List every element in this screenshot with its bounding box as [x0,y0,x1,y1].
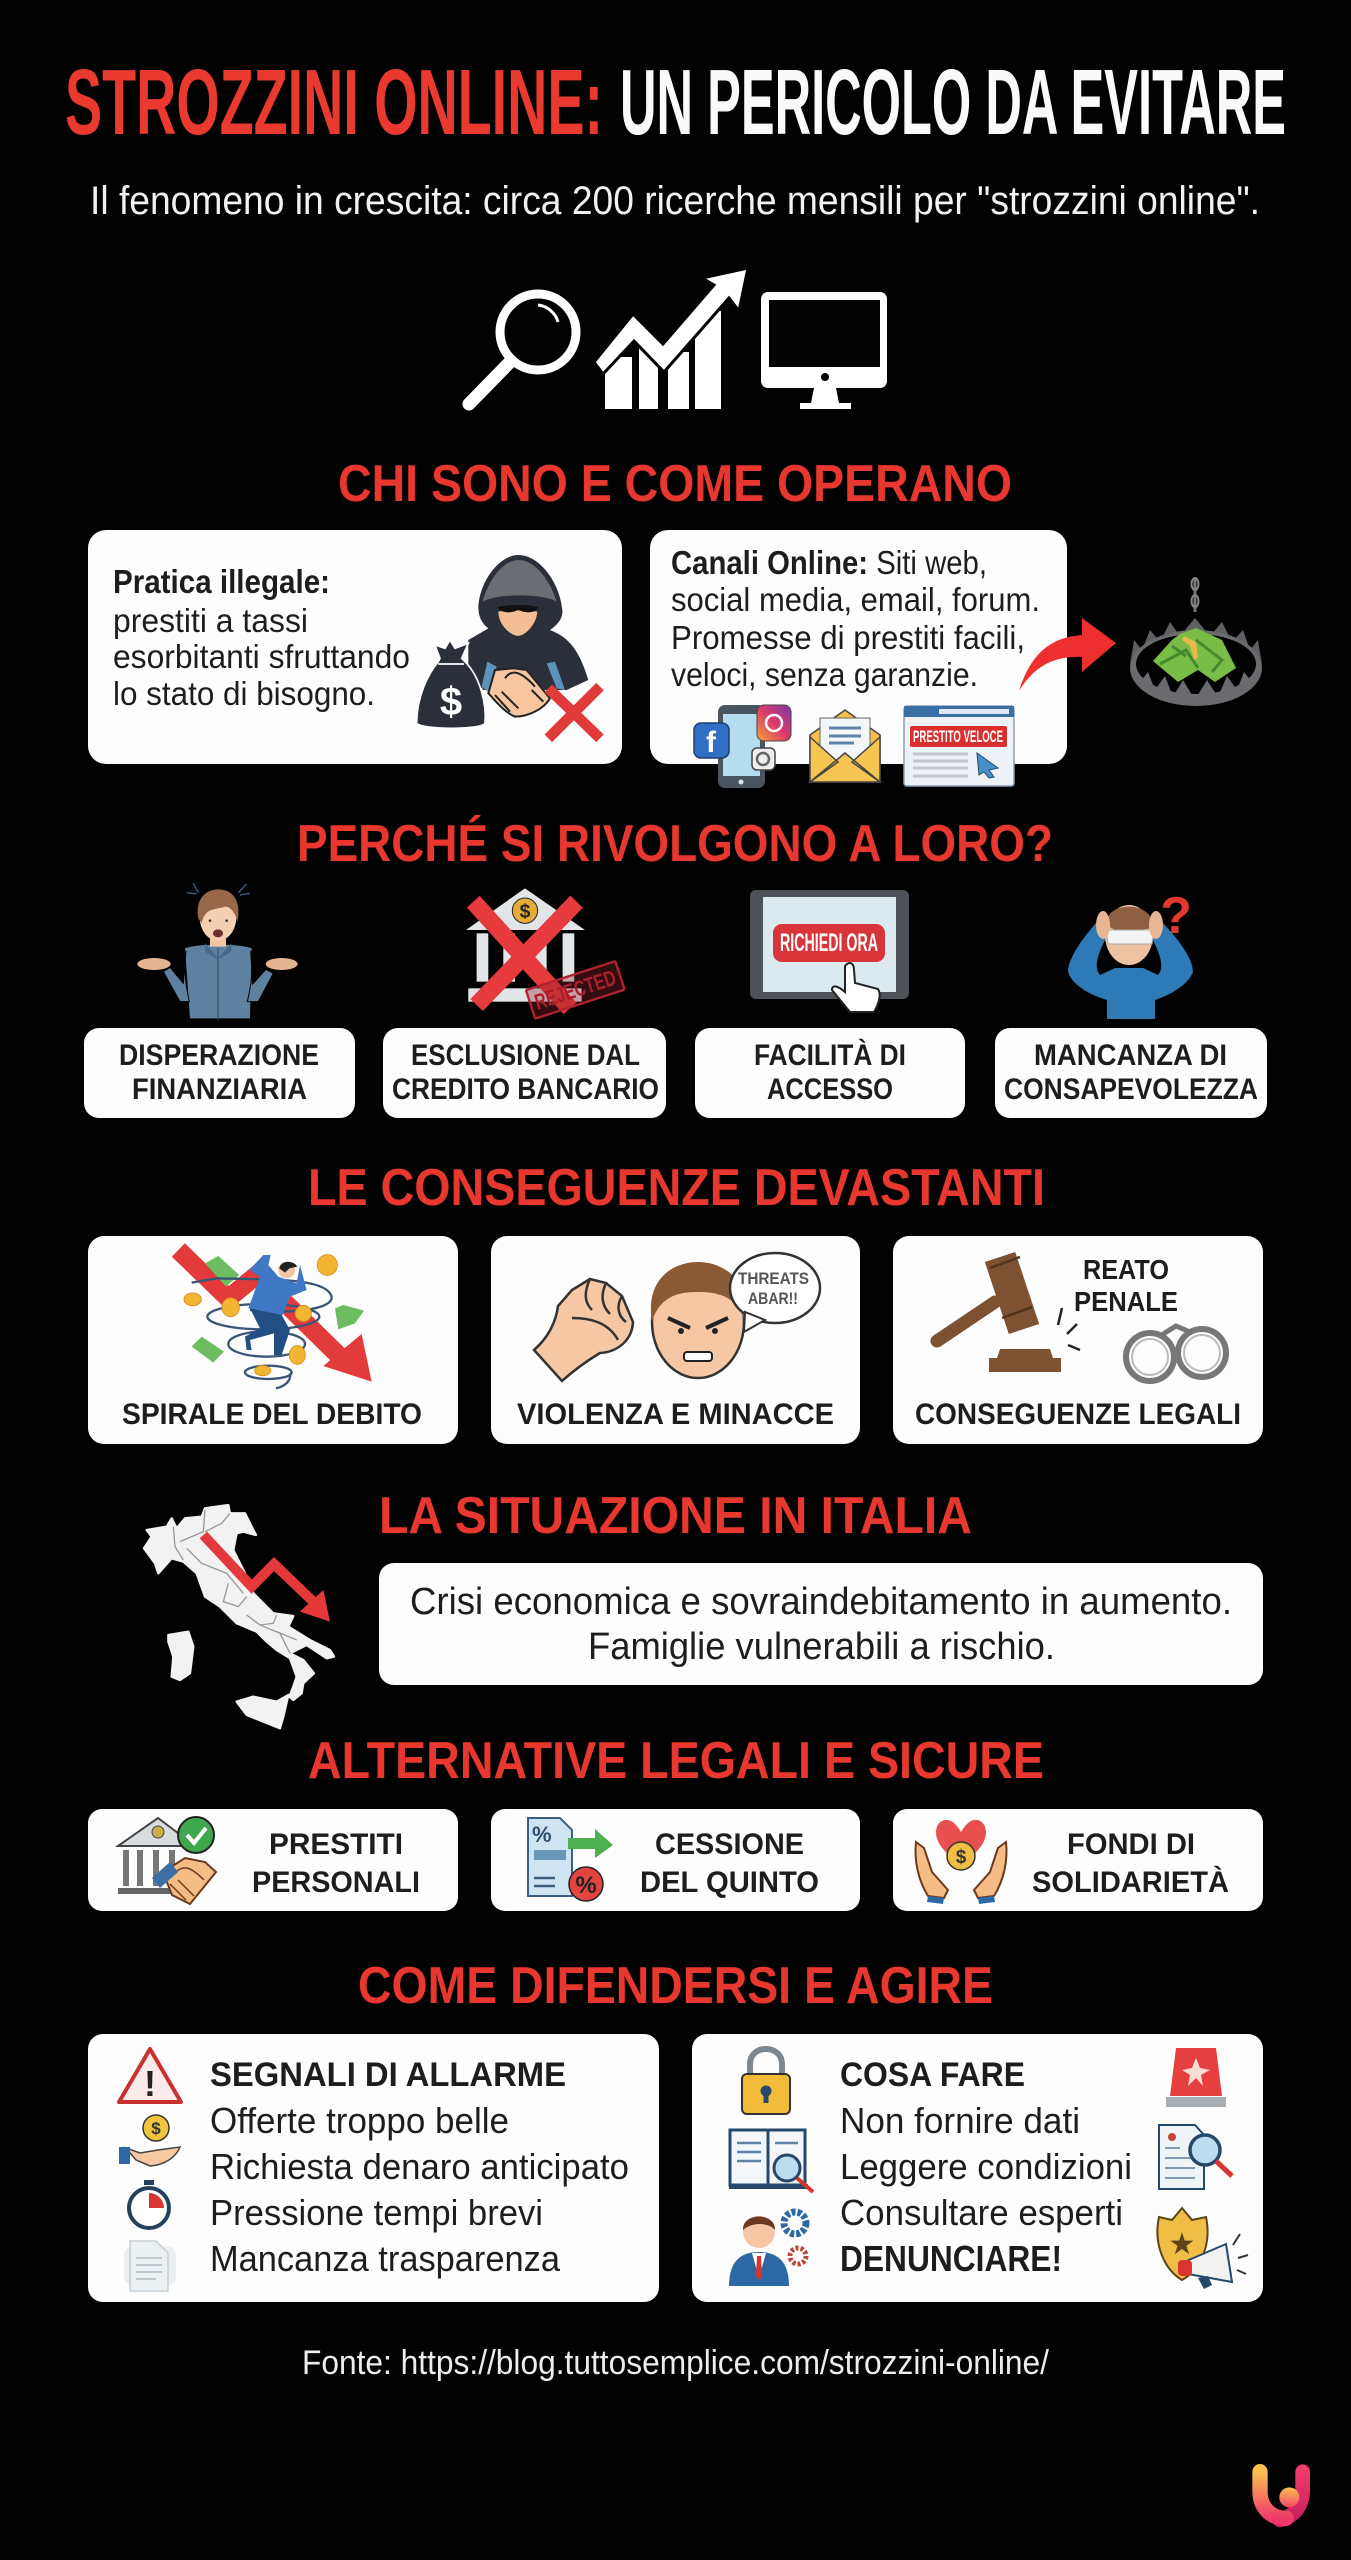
panel: segnali di allarme [88,2034,659,2302]
label box: facilità di accesso: FACILITÀ DI [754,1038,906,1072]
text: canali online: Promesse di prestiti facili, [671,619,1025,656]
text: segnali di allarme: SEGNALI DI ALLARME [210,2056,566,2094]
label: cessione del quinto: CESSIONE [655,1828,804,1861]
icon: map of italy with falling arrow [144,1505,334,1728]
label: cessione del quinto: DEL QUINTO [640,1866,819,1899]
text: cosa fare: Non fornire dati [840,2100,1080,2141]
panel: crisi economica: Famiglie vulnerabili a rischio. [588,1626,1055,1668]
icon: browser window prestito veloce [904,706,1014,786]
label: violenza e minacce: VIOLENZA E MINACCE [517,1398,834,1431]
text: cosa fare: Consultare esperti [840,2192,1123,2233]
icon: threats speech bubble: ABAR!! [748,1289,798,1308]
icon: tablet with richiedi ora button: RICHIEDI ORA [780,929,878,957]
icon: document with percent and arrow [528,1818,613,1901]
text: canali online [671,544,1040,693]
icon: bear trap with money [1130,578,1262,706]
label box: mancanza di consapevolezza: CONSAPEVOLEZZA [1004,1073,1258,1106]
icon: open book with magnifier [729,2130,813,2192]
label box: facilità di accesso [695,1028,965,1118]
label box: mancanza di consapevolezza: MANCANZA DI [1034,1039,1227,1072]
panel: fondi di solidarietà [893,1809,1263,1911]
icon: magnifier [469,294,576,404]
text: cosa fare [840,2056,1132,2279]
logo [1260,2472,1303,2520]
heading: alternative legali e sicure: ALTERNATIVE LEGALI E SICURE [308,1732,1044,1790]
icon: hands holding heart and coin: $ [956,1847,967,1868]
icon: hooded loan shark with money bag and handshake: $ [440,680,462,724]
icon: alarm siren [1166,2048,1226,2107]
text: pratica illegale [113,563,410,712]
heading: le conseguenze devastanti: LE CONSEGUENZE DEVASTANTI [308,1159,1045,1217]
panel: crisi economica [379,1563,1263,1685]
icon: document with percent and arrow: % [575,1872,597,1899]
label box: esclusione dal credito bancario: ESCLUSIONE DAL [411,1039,640,1072]
label box: esclusione dal credito bancario [383,1028,666,1118]
panel: crisi economica: Crisi economica e sovraindebitamento in aumento. [410,1581,1232,1623]
icon: hooded loan shark with money bag and handshake [417,555,600,738]
icon: phone with social apps: f [706,726,717,759]
icon: bank with check and handshake [118,1817,216,1904]
text: canali online: veloci, senza garanzie. [671,656,978,693]
icon: debt spiral with falling man [178,1250,372,1388]
text: segnali di allarme: Richiesta denaro anticipato [210,2146,629,2187]
text: segnali di allarme [210,2056,629,2279]
panel: cosa fare [692,2034,1263,2302]
label box: disperazione finanziaria [84,1028,355,1118]
icon: blindfolded person with question mark: ? [1160,887,1192,945]
icon: hands holding heart and coin [916,1820,1006,1904]
icon: judge gavel [937,1257,1080,1372]
panel: canali online [650,530,1067,788]
text: pratica illegale: prestiti a tassi [113,602,308,639]
panel: cessione del quinto [491,1809,860,1911]
text: reato penale: PENALE [1074,1286,1178,1317]
icon: coin over hand: $ [151,2119,161,2138]
label: cessione del quinto [640,1828,819,1899]
icon: padlock [742,2049,790,2114]
panel: prestiti personali [88,1809,458,1911]
panel: violenza e minacce [491,1236,860,1444]
heading: chi sono e come operano: CHI SONO E COME OPERANO [338,455,1012,513]
text: cosa fare: Leggere condizioni [840,2146,1132,2187]
icon: phone with social apps [694,705,791,788]
icon: tablet with richiedi ora button [750,890,909,1012]
text: pratica illegale: esorbitanti sfruttando [113,638,410,675]
text: canali online: social media, email, forum. [671,581,1040,618]
label box: disperazione finanziaria: FINANZIARIA [132,1073,307,1106]
icon: threats speech bubble [730,1253,820,1332]
label: prestiti personali: PERSONALI [252,1866,420,1899]
panel: conseguenze legali [893,1236,1263,1444]
label box: esclusione dal credito bancario: CREDITO BANCARIO [392,1073,659,1106]
label box: facilità di accesso: ACCESSO [767,1073,893,1106]
icon: growth chart with arrow [594,268,748,409]
panel: spirale del debito [88,1236,458,1444]
icon: expert with gears [729,2212,806,2286]
panel: pratica illegale [88,530,622,764]
text: pratica illegale: lo stato di bisogno. [113,675,375,712]
icon: clenched fist [534,1279,633,1381]
label: fondi di solidarietà [1032,1828,1229,1899]
text: segnali di allarme: Offerte troppo belle [210,2100,509,2141]
icon group: search, growth, computer [469,268,887,409]
title: STROZZINI ONLINE: [65,50,603,154]
icon: police badge and megaphone: ★ [1169,2228,1195,2261]
icon: bank crossed out and rejected stamp: $ [520,902,531,923]
icon: stopwatch [129,2180,169,2228]
text: reato penale: REATO [1083,1254,1169,1285]
text: segnali di allarme: Mancanza trasparenza [210,2238,561,2279]
icon: angry face [651,1262,746,1378]
heading: la situazione in italia: LA SITUAZIONE IN ITALIA [379,1487,972,1545]
label box: disperazione finanziaria: DISPERAZIONE [119,1039,319,1072]
text: cosa fare: DENUNCIARE! [840,2238,1062,2279]
icon: email envelope [810,710,880,782]
label: prestiti personali [252,1828,420,1899]
source line: Fonte: https://blog.tuttosemplice.com/strozzini-online/ [302,2344,1050,2382]
icon: blurred document [124,2241,176,2291]
icon: blindfolded person with question mark [1068,887,1193,1019]
heading: come difendersi e agire: COME DIFENDERSI E AGIRE [358,1957,993,2015]
icon: coin over hand [119,2115,180,2166]
icon: bank crossed out and rejected stamp [466,888,625,1019]
subtitle: Il fenomeno in crescita: circa 200 ricerche mensili per "strozzini online". [90,179,1260,223]
label: conseguenze legali: CONSEGUENZE LEGALI [915,1398,1241,1431]
icon: computer monitor [761,292,887,409]
icon: threats speech bubble: THREATS [738,1269,809,1288]
icon: police badge and megaphone [1157,2208,1248,2289]
icon: warning triangle [119,2049,181,2104]
icon: document with magnifier [1159,2125,1232,2189]
icon: warning triangle: ! [144,2063,156,2104]
label: fondi di solidarietà: SOLIDARIETÀ [1032,1865,1229,1899]
text: segnali di allarme: Pressione tempi brevi [210,2192,543,2233]
label: prestiti personali: PRESTITI [269,1828,403,1861]
icon: handcuffs [1126,1326,1226,1381]
text: pratica illegale: Pratica illegale: [113,563,330,600]
text: reato penale [1074,1254,1178,1317]
icon: document with percent and arrow: % [532,1822,552,1847]
arrow: curved red arrow to trap [1019,618,1116,691]
icon: desperate person shrugging [137,883,298,1020]
heading: perché si rivolgono a loro: PERCHÉ SI RIVOLGONO A LORO? [297,815,1053,873]
icon: bank crossed out and rejected stamp: REJECTED [531,965,619,1015]
text: canali online: Canali Online: Siti web, [671,544,987,581]
label: fondi di solidarietà: FONDI DI [1067,1828,1195,1861]
text: cosa fare: COSA FARE [840,2056,1025,2094]
icon: browser window prestito veloce: PRESTITO VELOCE [913,727,1003,746]
label: spirale del debito: SPIRALE DEL DEBITO [122,1398,422,1431]
label box: mancanza di consapevolezza [995,1028,1267,1118]
